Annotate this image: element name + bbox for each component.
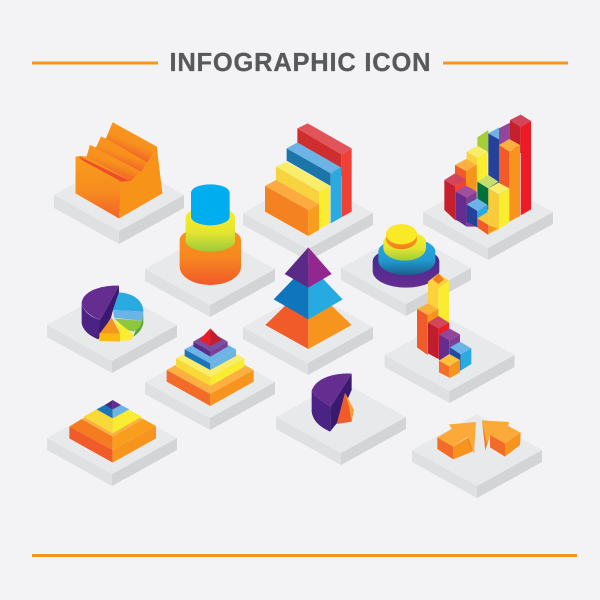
title rule right	[443, 62, 568, 64]
icon: stacked cylinders on platform	[145, 184, 275, 317]
icon: pie chart on platform	[47, 286, 177, 373]
icon: multicolour bar chart on platform	[423, 115, 553, 260]
icon: folded area chart on platform	[54, 122, 184, 244]
icon: descending stair bars on platform	[384, 273, 514, 403]
icon: stepped bars on platform	[243, 123, 373, 261]
icon: three-tier pyramid on platform	[243, 247, 373, 375]
bottom rule	[32, 554, 577, 557]
icon: small pie wedge on platform	[276, 374, 406, 465]
icon: two converging arrows on platform	[412, 414, 542, 498]
title: INFOGRAPHIC ICON	[170, 49, 430, 77]
icon: stacked rings on platform	[341, 224, 471, 316]
icon: stepped pyramid with red tip on platform	[145, 328, 275, 430]
icon: layered flat pyramid on platform	[47, 400, 177, 486]
title rule left	[32, 62, 158, 64]
